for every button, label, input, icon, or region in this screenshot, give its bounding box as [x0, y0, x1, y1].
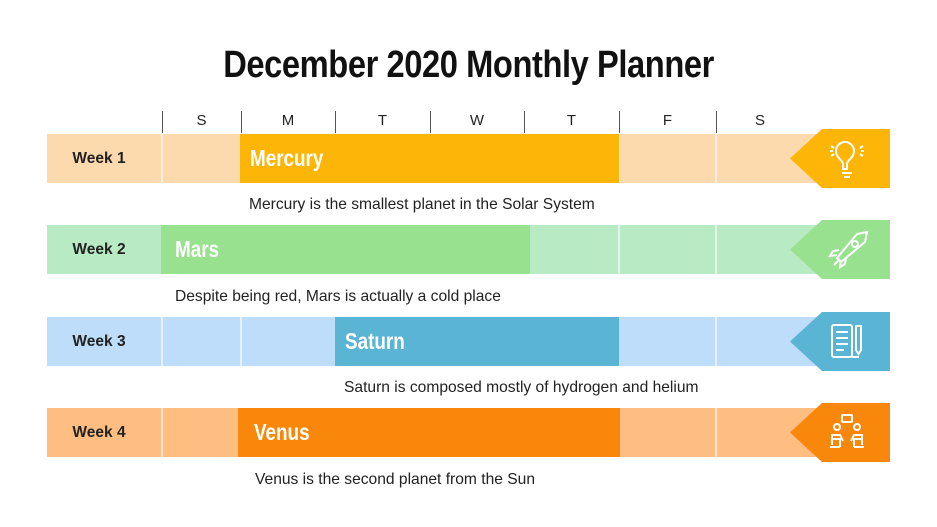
- bar: Mars: Mars: [175, 236, 219, 262]
- row: week 2: Week 2: [72, 241, 126, 258]
- day header: S: [196, 112, 206, 129]
- tag: meeting icon: [790, 403, 890, 462]
- bar: Venus: [238, 408, 620, 457]
- tag: rocket icon: [790, 220, 890, 279]
- row: week 1: [47, 134, 847, 183]
- row: week 3: [47, 317, 847, 366]
- day header: W: [470, 112, 484, 129]
- day header: M: [282, 112, 294, 129]
- tag: document icon: [790, 312, 890, 371]
- row: week 4: Week 4: [72, 424, 126, 441]
- caption: Mars: Despite being red, Mars is actually a cold place: [175, 288, 501, 305]
- day header: T: [567, 112, 576, 129]
- caption: Mercury: Mercury is the smallest planet in the Solar System: [249, 196, 595, 213]
- day header: T: [378, 112, 387, 129]
- day header: [162, 111, 765, 133]
- bar: Mercury: Mercury: [250, 145, 323, 171]
- bar: Saturn: Saturn: [345, 328, 405, 354]
- row: week 1: Week 1: [72, 150, 126, 167]
- caption: Venus: Venus is the second planet from the Sun: [255, 471, 535, 488]
- bar: Saturn: [335, 317, 619, 366]
- row: week 2: [47, 225, 847, 274]
- caption: Saturn: Saturn is composed mostly of hydrogen and helium: [344, 379, 699, 396]
- tag: lightbulb icon: [790, 129, 890, 188]
- row: week 3: Week 3: [72, 333, 126, 350]
- bar: Mars: [161, 225, 530, 274]
- row: week 4: [47, 408, 847, 457]
- day header: F: [663, 112, 672, 129]
- title: December 2020 Monthly Planner: [223, 44, 714, 86]
- bar: Venus: Venus: [254, 419, 310, 445]
- day header: S: [755, 112, 765, 129]
- bar: Mercury: [240, 134, 619, 183]
